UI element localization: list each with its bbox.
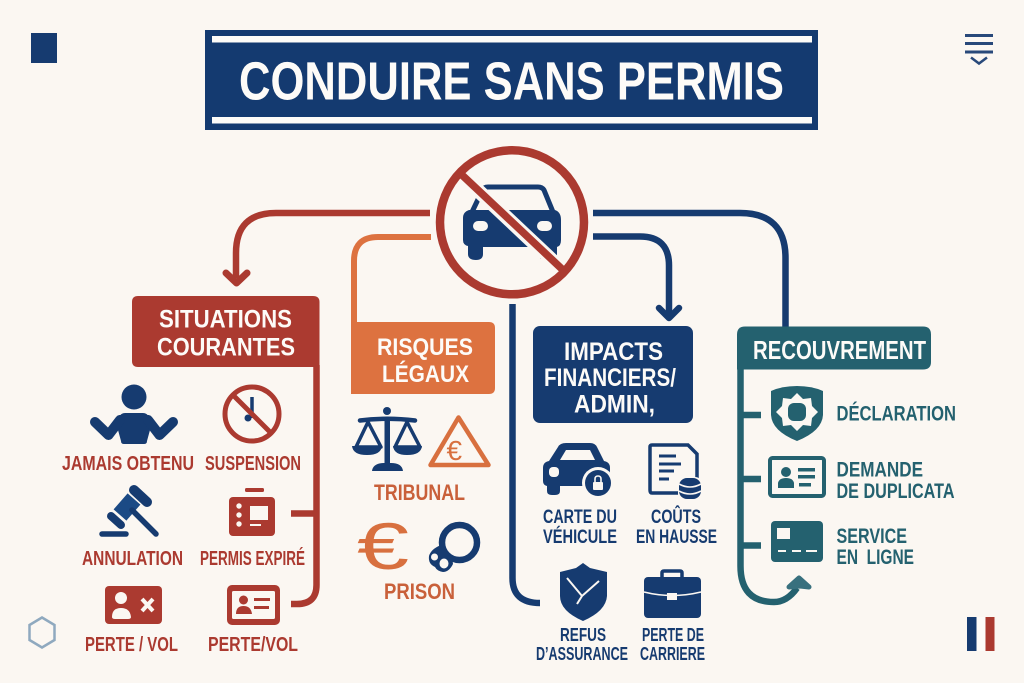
label: perte de carrière	[640, 625, 705, 664]
label: demande de duplicata	[836, 458, 954, 503]
label: refus d'assurance: REFUS	[560, 625, 606, 645]
connector: navy to insurance row	[512, 304, 540, 603]
icon: briefcase	[644, 571, 701, 618]
icon: shield with gear	[771, 386, 823, 441]
icon: prohibited car	[440, 150, 584, 294]
icon: id card	[227, 585, 280, 625]
icon: scales of justice	[352, 407, 422, 471]
heading: impacts financiers: ADMIN,	[574, 390, 655, 418]
label: carte du véhicule	[543, 506, 617, 548]
connector: orange to legal risks	[354, 237, 431, 324]
prohibition ring	[440, 150, 584, 294]
icon: hexagon	[30, 618, 54, 648]
icon: person shrugging	[95, 384, 173, 444]
icon: expired permit device	[229, 488, 275, 536]
connector: red branch with ticks	[291, 365, 316, 604]
arrow: navy to financial impacts	[593, 236, 679, 318]
label: demande de duplicata: DE DUPLICATA	[836, 480, 954, 503]
label: perte/vol: PERTE/VOL	[208, 634, 298, 656]
connector: navy to recovery	[593, 213, 786, 327]
panel: impacts financiers	[533, 326, 717, 664]
icon: euro warning triangle: €	[446, 435, 462, 466]
label: déclaration: DÉCLARATION	[836, 402, 956, 426]
heading: recouvrement: RECOUVREMENT	[753, 335, 926, 365]
icon: gavel	[102, 490, 156, 534]
arrow: red connector to situations	[226, 213, 430, 283]
label: demande de duplicata: DEMANDE	[836, 458, 923, 482]
heading: recouvrement	[737, 326, 931, 370]
icon: handcuffs	[429, 525, 477, 572]
heading: situations courantes	[132, 296, 320, 367]
label: service en ligne: EN LIGNE	[836, 546, 914, 569]
icon: euro symbol: €	[357, 509, 409, 583]
heading: impacts financiers: IMPACTS	[564, 338, 663, 366]
title text: CONDUIRE SANS PERMIS	[239, 52, 784, 112]
heading: situations courantes: SITUATIONS	[159, 306, 292, 334]
icon: insurance shield	[560, 563, 607, 621]
car silhouette	[463, 187, 561, 260]
icon: menu lines with chevron	[965, 36, 993, 64]
icon: navy corner square	[31, 33, 57, 63]
prohibition slash	[462, 175, 563, 270]
label: permis expiré: PERMIS EXPIRÉ	[200, 547, 305, 570]
label: service en ligne: SERVICE	[836, 525, 907, 548]
label: tribunal: TRIBUNAL	[374, 480, 465, 505]
label: annulation: ANNULATION	[82, 548, 183, 570]
icon: service card	[771, 521, 823, 562]
icon: french flag	[967, 617, 994, 651]
icon: lost licence card	[105, 586, 162, 624]
heading: situations courantes: COURANTES	[157, 334, 295, 362]
label: perte / vol: PERTE / VOL	[85, 634, 178, 656]
icon: duplicate id card	[770, 458, 824, 496]
icon: suspension clock	[225, 387, 279, 441]
label: prison: PRISON	[384, 579, 455, 604]
connector: teal branch with ticks and arrow	[740, 365, 809, 602]
label: carte du véhicule: VÉHICULE	[543, 525, 617, 548]
heading: risques légaux	[351, 322, 495, 394]
title banner	[205, 30, 818, 130]
label: refus d'assurance	[536, 625, 628, 664]
panel: situations courantes	[62, 296, 320, 656]
label: perte de carrière: CARRIERE	[640, 644, 705, 664]
label: perte de carrière: PERTE DE	[642, 625, 704, 645]
heading: impacts financiers: FINANCIERS/	[544, 364, 676, 392]
label: coûts en hausse	[636, 504, 717, 548]
panel: risques légaux	[351, 322, 495, 604]
heading: impacts financiers	[533, 326, 693, 423]
icon: car with lock	[543, 443, 614, 499]
label: service en ligne	[836, 525, 914, 569]
icon: document with coins	[650, 445, 702, 501]
label: suspension: SUSPENSION	[205, 453, 301, 475]
icon: euro warning triangle	[430, 418, 488, 466]
heading: risques légaux: LÉGAUX	[382, 360, 469, 388]
heading: risques légaux: RISQUES	[377, 334, 473, 361]
label: refus d'assurance: D’ASSURANCE	[536, 644, 628, 664]
label: coûts en hausse: COÛTS	[651, 504, 701, 528]
label: coûts en hausse: EN HAUSSE	[636, 526, 717, 548]
label: jamais obtenu: JAMAIS OBTENU	[62, 453, 194, 475]
label: carte du véhicule: CARTE DU	[543, 506, 617, 528]
panel: recouvrement	[737, 326, 956, 602]
